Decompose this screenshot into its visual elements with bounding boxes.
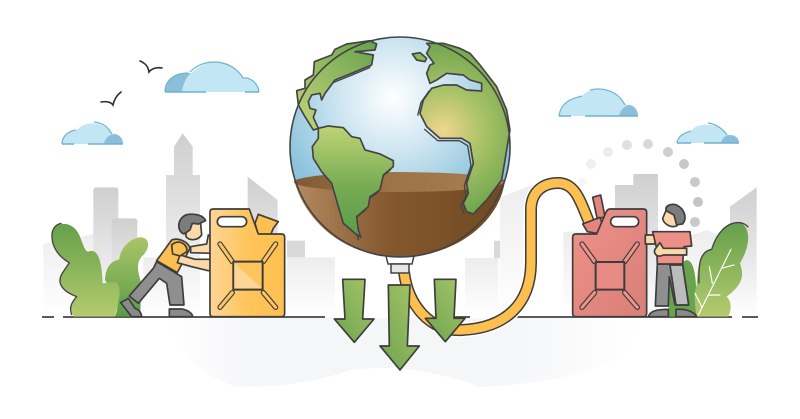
front arm [655, 243, 687, 256]
skyline: left [43, 133, 335, 317]
hair [179, 214, 206, 234]
south america [312, 126, 393, 237]
left plants [52, 223, 148, 317]
arrows down [334, 279, 465, 370]
lands [297, 41, 510, 237]
outline [290, 37, 510, 257]
yellow canister [210, 209, 285, 317]
cloud: right top [559, 89, 638, 116]
globe connector [386, 256, 414, 273]
head [663, 211, 682, 227]
handle [217, 217, 247, 227]
leaf veins [695, 249, 734, 315]
arrow left [334, 279, 374, 342]
nozzle [583, 217, 603, 233]
ground shadow [170, 318, 640, 387]
embossed X [582, 244, 637, 307]
hose [404, 183, 589, 330]
trousers [129, 262, 184, 305]
man holding canister [645, 204, 697, 317]
soil [294, 178, 505, 257]
rear foot [121, 298, 142, 317]
island [412, 53, 427, 62]
right plant [668, 223, 748, 317]
africa and eurasia [420, 43, 510, 214]
front foot [169, 309, 193, 317]
red canister [573, 195, 647, 317]
cloud: lower left [62, 122, 123, 144]
rear arm [645, 235, 655, 244]
embossed X [220, 244, 276, 307]
arms [191, 235, 211, 253]
north america [297, 41, 377, 130]
cap [255, 214, 278, 235]
shirt [653, 232, 692, 264]
man pushing canister [121, 214, 218, 317]
spout [593, 195, 605, 219]
trousers [655, 264, 689, 306]
head [186, 223, 202, 240]
hair [666, 204, 685, 225]
birds [101, 61, 162, 105]
ground line [42, 316, 758, 318]
skyline: centre and right [465, 174, 757, 317]
arrow right [425, 279, 465, 342]
arrow centre [380, 285, 419, 370]
soil surface [294, 172, 504, 192]
cloud: far right [677, 123, 739, 143]
dotted oil arc [578, 139, 703, 227]
handle [611, 217, 639, 227]
feet [648, 309, 668, 317]
globe [290, 37, 510, 257]
body [210, 209, 285, 317]
ocean [290, 37, 510, 257]
shirt [157, 239, 190, 273]
double coast lines [323, 58, 471, 240]
cloud: top left [165, 62, 259, 92]
body [573, 209, 647, 317]
